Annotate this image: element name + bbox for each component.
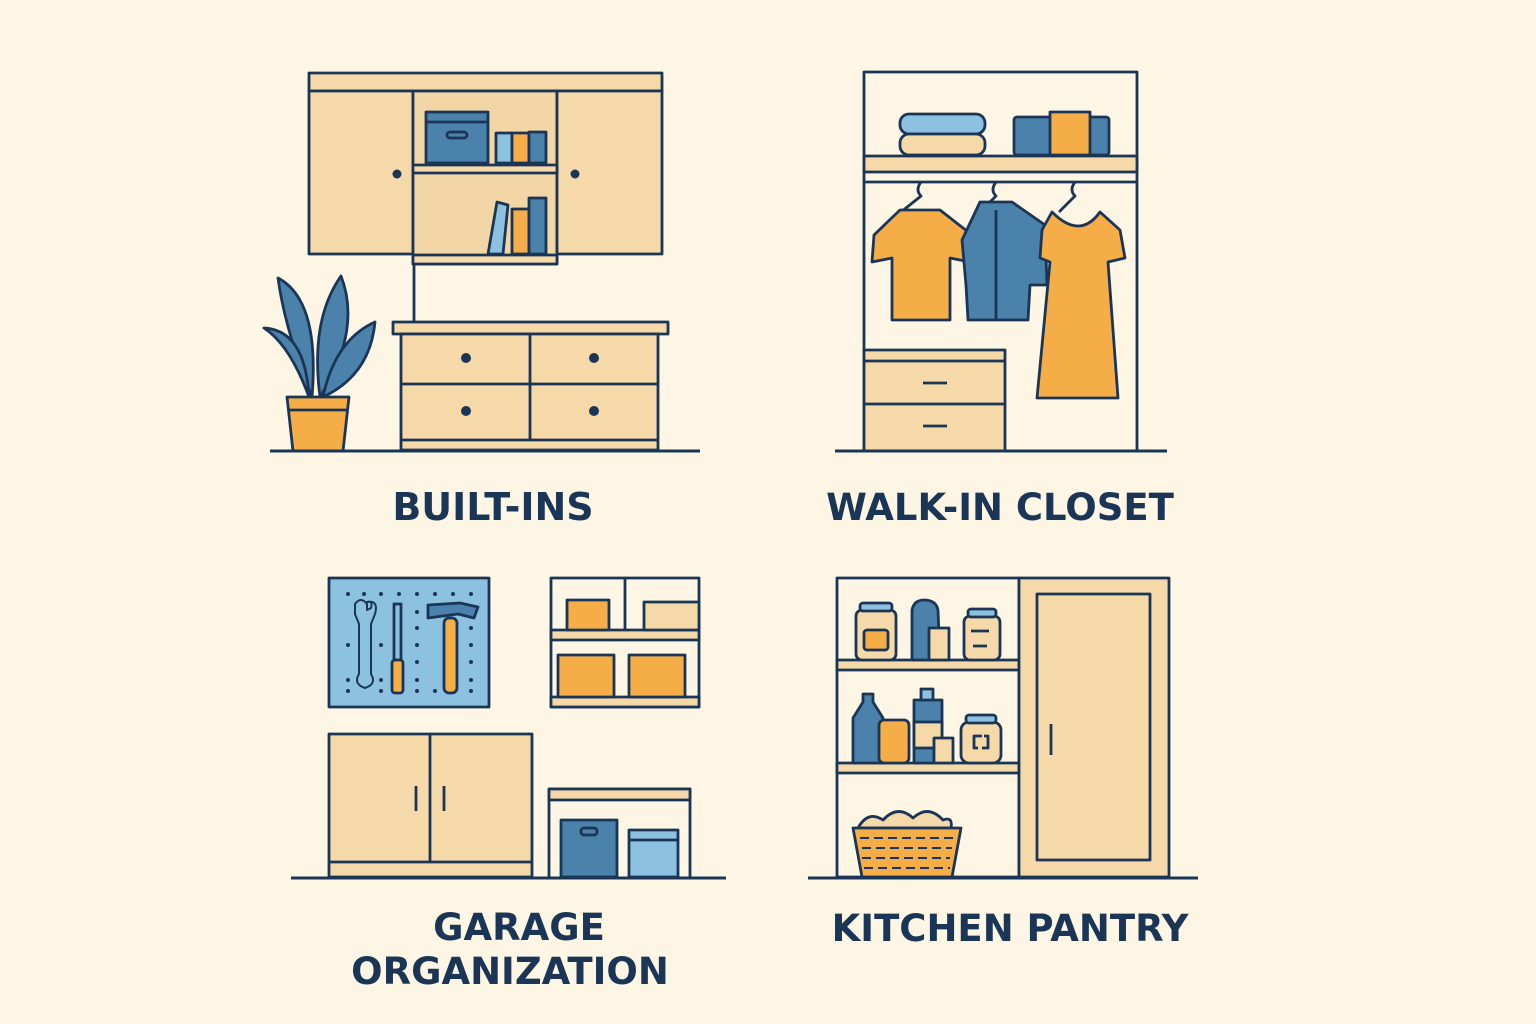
icon: floor cabinet xyxy=(329,734,532,877)
icon: orange shirt xyxy=(872,182,972,320)
panel: built-ins xyxy=(264,73,700,451)
icon: plant xyxy=(264,276,375,451)
panel: walk-in closet xyxy=(835,72,1167,451)
icon: wall cabinet xyxy=(309,73,662,322)
label: walk-in closet: WALK-IN CLOSET xyxy=(826,486,1175,529)
icon: wall shelves xyxy=(551,578,699,707)
label: garage organization: GARAGE xyxy=(433,906,605,949)
icon: basket xyxy=(853,811,961,877)
icon: closet drawers xyxy=(864,350,1005,451)
icon: bench with bins xyxy=(549,789,690,877)
panel: garage organization xyxy=(291,578,726,878)
label: garage organization: ORGANIZATION xyxy=(351,950,669,993)
icon: dress xyxy=(1037,182,1125,398)
icon: pegboard xyxy=(329,578,489,707)
panel: kitchen pantry xyxy=(808,578,1198,878)
label: built-ins: BUILT-INS xyxy=(392,485,594,529)
icon: pantry door xyxy=(1019,578,1169,877)
icon: closet frame xyxy=(864,72,1137,451)
label: kitchen pantry: KITCHEN PANTRY xyxy=(832,907,1190,950)
icon: blue shirt xyxy=(962,182,1047,320)
icon: pantry shelves xyxy=(837,578,1019,877)
icon: folded towels xyxy=(900,112,1109,155)
icon: dresser xyxy=(393,322,668,450)
